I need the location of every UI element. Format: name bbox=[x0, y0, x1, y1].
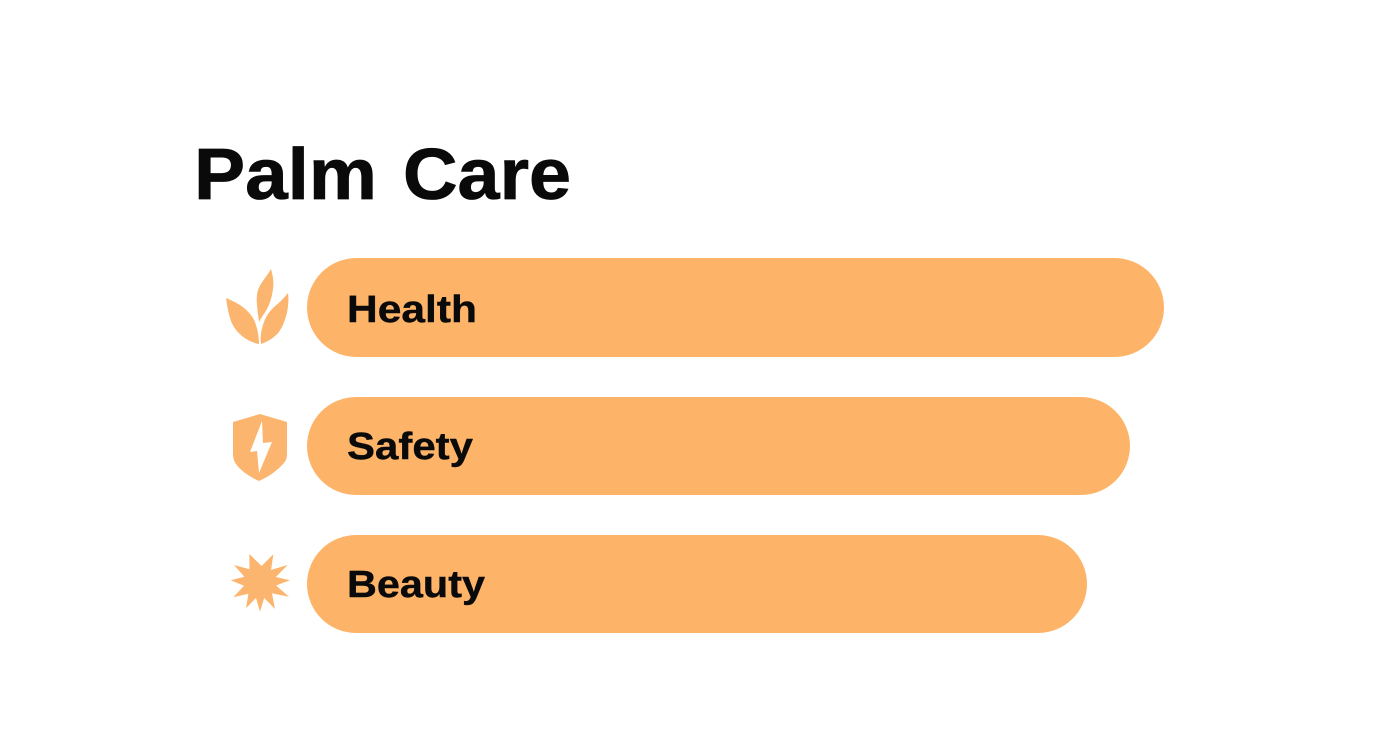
title: Palm bbox=[194, 135, 377, 215]
row: Safety bbox=[233, 397, 1130, 495]
row: Beauty bbox=[231, 535, 1087, 633]
bar: Health bbox=[307, 258, 1164, 357]
label: Beauty: Beauty bbox=[347, 564, 485, 606]
label: Safety: Safety bbox=[347, 426, 473, 468]
icon: starburst bbox=[231, 554, 290, 612]
label: Health: Health bbox=[347, 289, 477, 331]
bar: Safety bbox=[307, 397, 1130, 495]
title: Care bbox=[403, 135, 571, 215]
title bbox=[194, 135, 571, 215]
icon: shield with lightning bolt bbox=[233, 414, 287, 481]
row: Health bbox=[226, 258, 1164, 357]
bar: Beauty bbox=[307, 535, 1087, 633]
icon: leaves bbox=[226, 269, 288, 344]
